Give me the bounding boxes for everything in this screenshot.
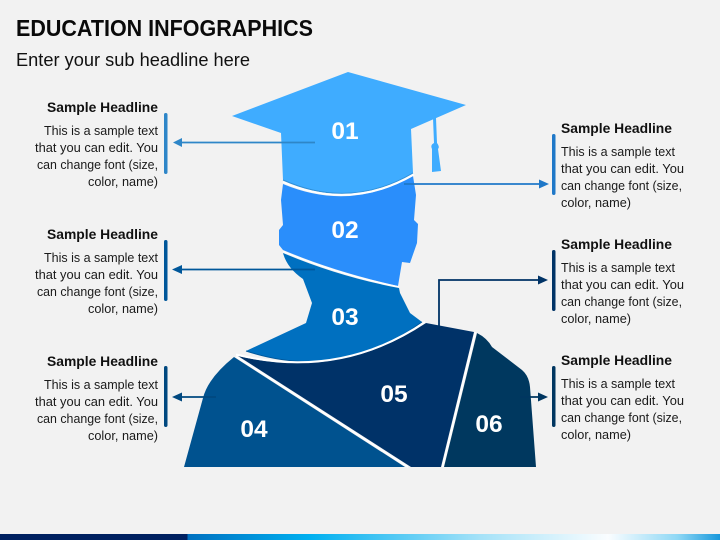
panel: right 1: color, name) [561,196,631,210]
segment 02: head [279,174,418,286]
segment 05: chest: 05 [380,381,408,408]
panel: right 2: Sample Headline [561,237,672,252]
panel: left 3: that you can edit. You [35,395,158,409]
panel: right 2 [552,237,684,326]
arrow: 02 [172,265,315,274]
panel: right 3: can change font (size, [561,411,682,425]
panel: right 1: Sample Headline [561,121,672,136]
panel: right 3: color, name) [561,428,631,442]
arrow: 04 [172,392,216,402]
panel: left 1 [35,100,168,189]
panel: left 2: color, name) [88,302,158,316]
segment 04: left shoulder [184,357,405,467]
panel: left 3: can change font (size, [37,412,158,426]
panel: right 3: Sample Headline [561,353,672,368]
subtitle: Enter your sub headline here [16,50,250,70]
panel: right 2: can change font (size, [561,295,682,309]
panel: right 1: can change font (size, [561,179,682,193]
panel: left 2: This is a sample text [44,251,159,265]
segment 06: right shoulder [442,332,536,467]
panel: left 2: Sample Headline [47,227,158,242]
segment 01: graduation cap: 01 [331,118,359,145]
panel: left 1: that you can edit. You [35,141,158,155]
segment 03: neck: 03 [331,304,359,331]
panel: right 3 [552,353,684,442]
segment 04: left shoulder: 04 [240,416,268,443]
panel: left 1: This is a sample text [44,124,159,138]
panel: right 1: that you can edit. You [561,162,684,176]
panel: right 2: that you can edit. You [561,278,684,292]
panel: right 1: This is a sample text [561,145,676,159]
arrow: 05 [439,276,548,330]
arrow: 01 [173,138,315,147]
panel: left 2 [35,227,168,316]
segment 06: right shoulder: 06 [475,411,503,438]
arrow: 06 [520,392,548,402]
panel: left 3: Sample Headline [47,354,158,369]
panel: left 1: can change font (size, [37,158,158,172]
panel: left 3 [35,354,168,443]
panel: left 3: This is a sample text [44,378,159,392]
title: EDUCATION INFOGRAPHICS [16,15,313,41]
panel: left 1: Sample Headline [47,100,158,115]
panel: right 2: color, name) [561,312,631,326]
graduate figure [184,72,536,467]
panel: left 2: can change font (size, [37,285,158,299]
panel: right 1 [552,121,684,210]
panel: right 2: This is a sample text [561,261,676,275]
segment 03: neck [246,252,422,362]
segment 05: chest [236,322,474,467]
segment 01: graduation cap [232,72,466,193]
panel: left 1: color, name) [88,175,158,189]
arrow: 01 right [404,180,549,188]
panel: right 3: that you can edit. You [561,394,684,408]
panel: right 3: This is a sample text [561,377,676,391]
footer bar [0,534,720,540]
panel: left 3: color, name) [88,429,158,443]
panel: left 2: that you can edit. You [35,268,158,282]
segment 02: head: 02 [331,217,359,244]
